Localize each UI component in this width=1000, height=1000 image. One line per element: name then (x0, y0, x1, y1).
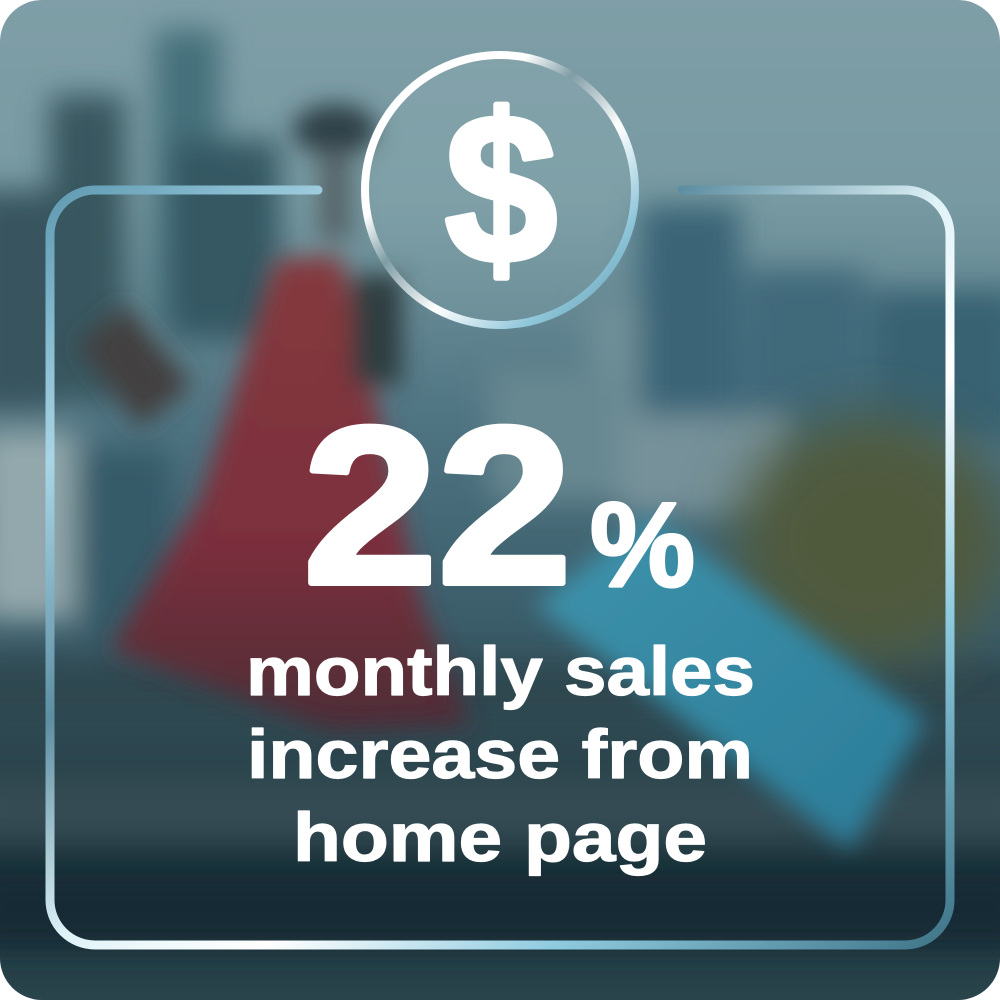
caption (246, 633, 755, 876)
suitcase (535, 515, 925, 850)
caption: increase from (247, 716, 753, 793)
statistic: 22%: % (590, 478, 695, 612)
tree (735, 415, 1000, 665)
icon: dollar in circle (365, 55, 635, 325)
caption: monthly sales (246, 633, 755, 710)
rounded frame (50, 190, 950, 945)
dress (78, 104, 470, 730)
icon: dollar in circle: $ (445, 70, 557, 307)
statistic: 22%: 22 (303, 381, 572, 631)
statistic: 22% (308, 424, 694, 588)
caption: home page (293, 799, 707, 876)
